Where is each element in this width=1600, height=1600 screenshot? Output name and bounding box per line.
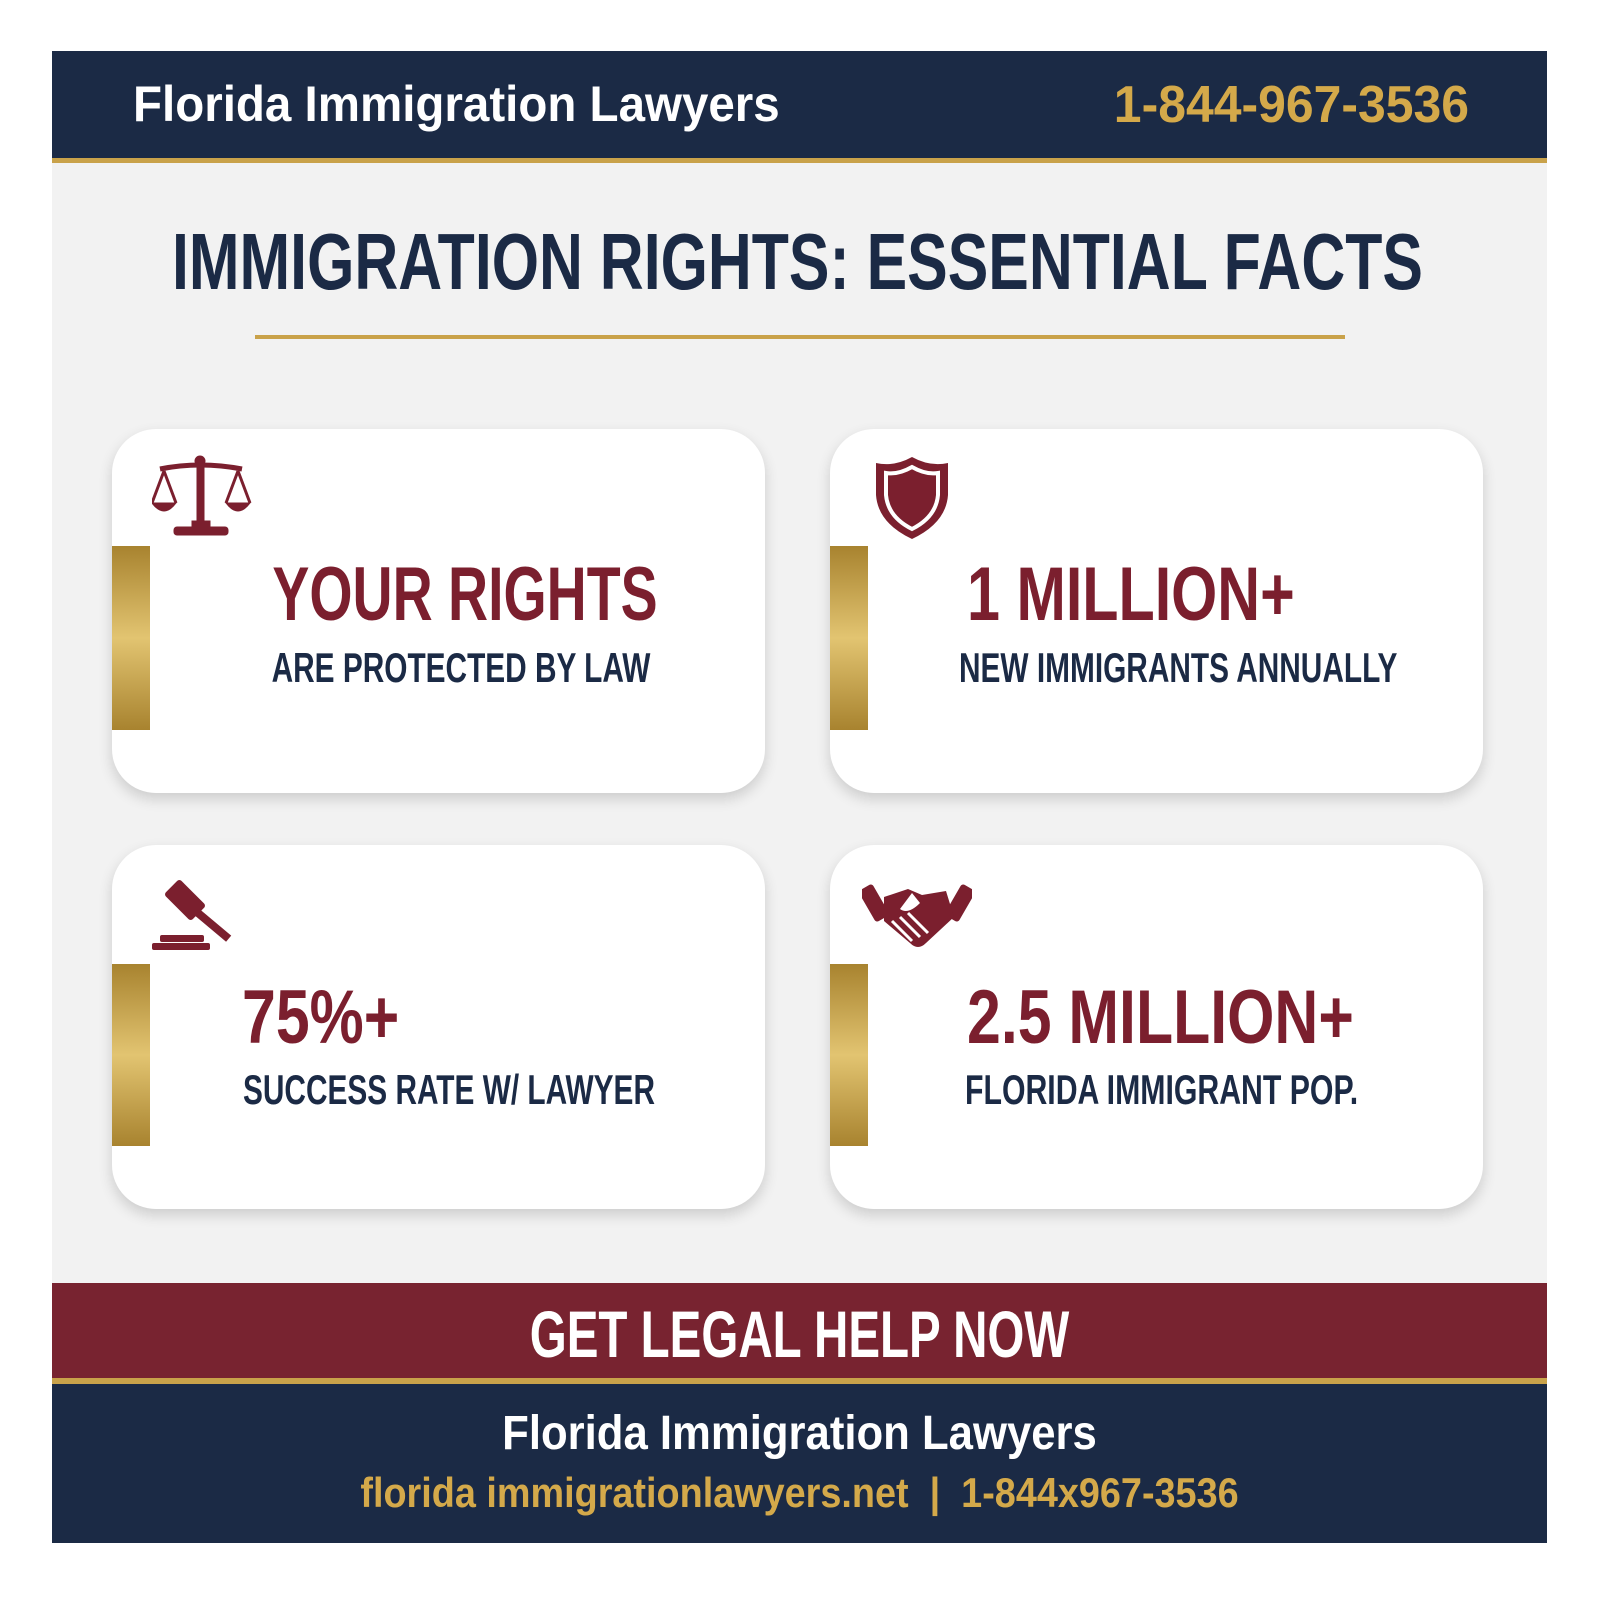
header firm name: Florida Immigration Lawyers <box>133 76 780 132</box>
footer <box>52 1384 1547 1543</box>
icon: gavel <box>152 880 232 950</box>
card: 2.5 million <box>830 845 1483 1209</box>
gold bar <box>830 546 868 730</box>
stat: your rights: YOUR RIGHTS <box>272 552 658 637</box>
card: 1 million <box>830 429 1483 793</box>
stat: 2.5 MILLION+ <box>967 975 1354 1060</box>
title: IMMIGRATION RIGHTS: ESSENTIAL FACTS <box>172 217 1423 306</box>
header bar <box>52 51 1547 163</box>
subtitle: ARE PROTECTED BY LAW <box>272 644 650 691</box>
cta band <box>52 1283 1547 1384</box>
icon: handshake <box>862 884 972 947</box>
icon: shield <box>876 457 948 539</box>
footer firm name: Florida Immigration Lawyers <box>502 1407 1097 1460</box>
gold bar <box>112 964 150 1146</box>
card: 75% <box>112 845 765 1209</box>
footer contact: florida immigrationlawyers.net | 1-844x967-3536 <box>360 1469 1239 1516</box>
header phone: 1-844-967-3536 <box>1114 76 1469 134</box>
card: your rights <box>112 429 765 793</box>
subtitle: SUCCESS RATE W/ LAWYER <box>243 1066 655 1113</box>
stat: 1 MILLION+ <box>967 552 1295 637</box>
gold bar <box>112 546 150 730</box>
subtitle: FLORIDA IMMIGRANT POP. <box>965 1066 1358 1113</box>
cta text: GET LEGAL HELP NOW <box>530 1297 1069 1371</box>
stat: 75%+ <box>242 975 399 1060</box>
gold bar <box>830 964 868 1146</box>
icon: scales <box>152 456 252 536</box>
subtitle: NEW IMMIGRANTS ANNUALLY <box>959 644 1397 691</box>
